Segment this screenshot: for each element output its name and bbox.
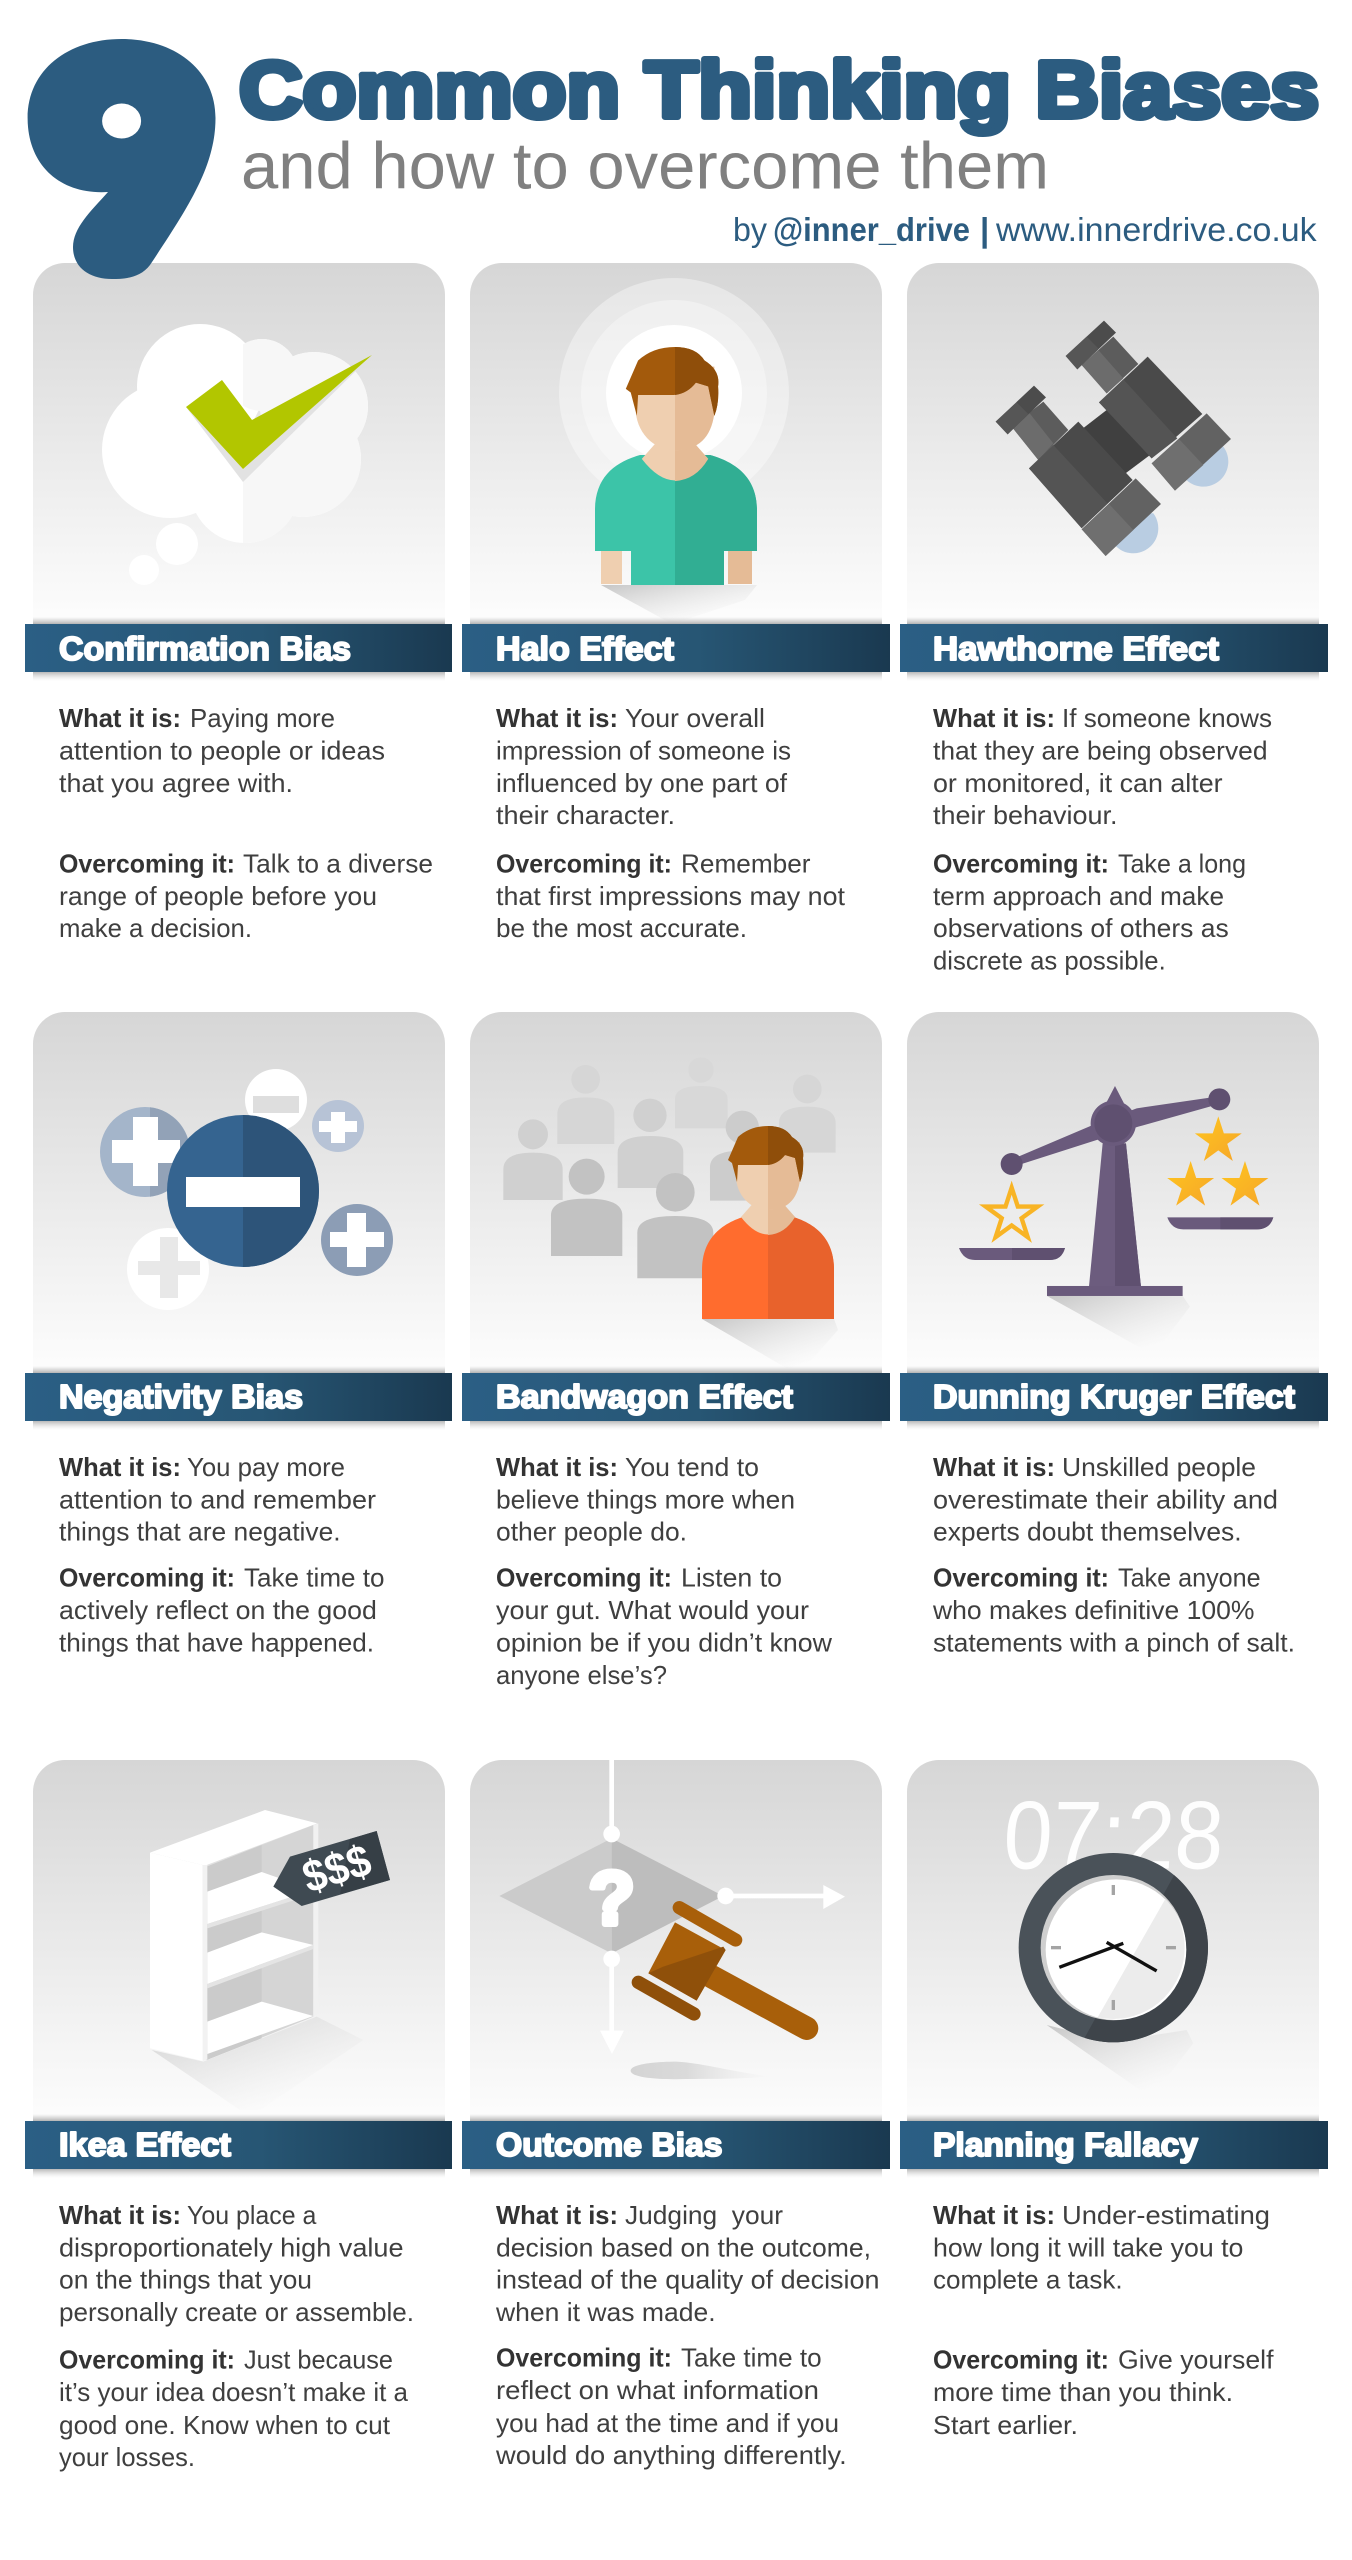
panel: Bandwagon Effect bbox=[462, 1012, 890, 1690]
text block: Negativity Bias: things that have happened. bbox=[59, 1628, 374, 1658]
icon: digital time and wall clock bbox=[1001, 1781, 1227, 2095]
panel background bbox=[907, 1760, 1319, 2121]
text block: Outcome Bias: you had at the time and if you bbox=[496, 2408, 839, 2438]
ribbon: Outcome Bias bbox=[462, 2114, 890, 2178]
icon: thought cloud with tick bbox=[102, 324, 372, 585]
text block: Hawthorne Effect: or monitored, it can alter bbox=[933, 768, 1223, 798]
ribbon: Hawthorne Effect bbox=[900, 617, 1328, 681]
text block: Hawthorne Effect: that they are being observed bbox=[933, 736, 1268, 766]
ribbon: Confirmation Bias: Confirmation Bias bbox=[59, 630, 351, 667]
text block: Halo Effect bbox=[496, 703, 846, 943]
text block: Negativity Bias: You pay more bbox=[187, 1452, 345, 1482]
byline: www.innerdrive.co.uk bbox=[995, 211, 1317, 248]
panel: Ikea Effect bbox=[25, 1760, 452, 2472]
text block: Bandwagon Effect: other people do. bbox=[496, 1517, 687, 1547]
icon: plus and minus circles bbox=[100, 1069, 393, 1310]
text block: Hawthorne Effect: their behaviour. bbox=[933, 800, 1118, 830]
text block: Negativity Bias: Take time to bbox=[244, 1563, 384, 1593]
text block: Dunning Kruger Effect: What it is: bbox=[933, 1452, 1055, 1482]
byline bbox=[733, 211, 1317, 248]
text block: Ikea Effect: on the things that you bbox=[59, 2265, 312, 2295]
panel: Halo Effect bbox=[462, 263, 890, 943]
text block: Planning Fallacy: Under-estimating bbox=[1062, 2200, 1270, 2230]
text block: Bandwagon Effect: Listen to bbox=[681, 1563, 782, 1593]
text block: Halo Effect: their character. bbox=[496, 800, 675, 830]
text block: Confirmation Bias bbox=[59, 703, 433, 943]
text block: Outcome Bias: What it is: bbox=[496, 2200, 618, 2230]
text block: Dunning Kruger Effect: statements with a pinch of salt. bbox=[933, 1628, 1295, 1658]
text block: Outcome Bias: Take time to bbox=[681, 2343, 822, 2373]
ribbon: Negativity Bias bbox=[25, 1366, 452, 1430]
text block: Planning Fallacy: What it is: bbox=[933, 2200, 1055, 2230]
text block: Dunning Kruger Effect: Unskilled people bbox=[1062, 1452, 1256, 1482]
numeral 9 bbox=[28, 39, 215, 279]
text block: Bandwagon Effect: your gut. What would your bbox=[496, 1595, 809, 1625]
ribbon: Halo Effect: Halo Effect bbox=[496, 630, 674, 667]
ribbon: Planning Fallacy bbox=[900, 2114, 1328, 2178]
text block: Confirmation Bias: make a decision. bbox=[59, 913, 252, 943]
panel: Hawthorne Effect bbox=[900, 263, 1328, 976]
text block: Bandwagon Effect: What it is: bbox=[496, 1452, 618, 1482]
text block: Hawthorne Effect: observations of others as bbox=[933, 913, 1229, 943]
ribbon: Planning Fallacy: Planning Fallacy bbox=[933, 2126, 1199, 2163]
ribbon: Ikea Effect bbox=[25, 2114, 452, 2178]
text block: Ikea Effect: You place a bbox=[187, 2200, 317, 2230]
text block: Bandwagon Effect: anyone else’s? bbox=[496, 1660, 667, 1690]
byline: by bbox=[733, 211, 767, 248]
panel background bbox=[907, 1012, 1319, 1373]
panel: Planning Fallacy bbox=[900, 1760, 1328, 2440]
text block: Bandwagon Effect: opinion be if you didn’t know bbox=[496, 1628, 832, 1658]
text block: Confirmation Bias: Overcoming it: bbox=[59, 848, 235, 878]
text block: Negativity Bias: actively reflect on the good bbox=[59, 1595, 377, 1625]
text block: Ikea Effect: Overcoming it: bbox=[59, 2345, 235, 2375]
icon: balance scales with stars bbox=[959, 1086, 1273, 1355]
text block: Negativity Bias: things that are negative. bbox=[59, 1517, 341, 1547]
ribbon: Outcome Bias: Outcome Bias bbox=[496, 2126, 722, 2163]
text block: Outcome Bias: decision based on the outcome, bbox=[496, 2232, 871, 2262]
text block: Planning Fallacy: how long it will take you to bbox=[933, 2232, 1243, 2262]
panel background bbox=[33, 1012, 445, 1373]
icon: digital time and wall clock: 07:28 bbox=[1001, 1781, 1227, 1889]
text block: Hawthorne Effect: term approach and make bbox=[933, 881, 1224, 911]
text block: Ikea Effect: Just because bbox=[244, 2345, 393, 2375]
text block: Bandwagon Effect: You tend to bbox=[625, 1452, 759, 1482]
text block: Hawthorne Effect: If someone knows bbox=[1062, 703, 1272, 733]
panel background bbox=[33, 1760, 445, 2121]
text block: Outcome Bias: instead of the quality of decision bbox=[496, 2265, 880, 2295]
text block: Confirmation Bias: Paying more bbox=[190, 703, 335, 733]
text block: Negativity Bias: attention to and remember bbox=[59, 1485, 376, 1515]
text block: Halo Effect: What it is: bbox=[496, 703, 618, 733]
text block: Negativity Bias: What it is: bbox=[59, 1452, 181, 1482]
text block: Ikea Effect: your losses. bbox=[59, 2442, 195, 2472]
text block: Dunning Kruger Effect: Take anyone bbox=[1118, 1563, 1261, 1593]
text block: Halo Effect: influenced by one part of bbox=[496, 768, 788, 798]
text block: Ikea Effect: good one. Know when to cut bbox=[59, 2410, 391, 2440]
text block: Ikea Effect: disproportionately high value bbox=[59, 2232, 404, 2262]
ribbon: Dunning Kruger Effect bbox=[900, 1366, 1328, 1430]
icon: person in orange shirt bbox=[702, 1126, 838, 1373]
icon: decision diamond and gavel bbox=[499, 1760, 845, 2079]
ribbon: Bandwagon Effect bbox=[462, 1366, 890, 1430]
text block: Confirmation Bias: attention to people or ideas bbox=[59, 736, 385, 766]
text block: Outcome Bias bbox=[495, 2200, 880, 2470]
ribbon: Halo Effect bbox=[462, 617, 890, 681]
ribbon: Hawthorne Effect: Hawthorne Effect bbox=[933, 630, 1219, 667]
title: Common Thinking Biases bbox=[239, 45, 1319, 134]
ribbon: Bandwagon Effect: Bandwagon Effect bbox=[496, 1378, 793, 1415]
text block: Planning Fallacy: complete a task. bbox=[933, 2265, 1123, 2295]
text block: Outcome Bias: when it was made. bbox=[495, 2297, 716, 2327]
text block: Planning Fallacy bbox=[933, 2200, 1274, 2440]
icon: flat-pack bookshelf with price tag bbox=[150, 1810, 390, 2110]
icon: binoculars bbox=[996, 321, 1231, 556]
panel background bbox=[33, 263, 445, 624]
panel background bbox=[470, 263, 882, 624]
panel: Negativity Bias bbox=[25, 1012, 452, 1658]
text block: Outcome Bias: would do anything differently. bbox=[495, 2440, 847, 2470]
panel background bbox=[470, 1760, 882, 2121]
panel: Dunning Kruger Effect bbox=[900, 1012, 1328, 1658]
ribbon: Dunning Kruger Effect: Dunning Kruger Effect bbox=[933, 1378, 1295, 1415]
text block: Negativity Bias: Overcoming it: bbox=[59, 1563, 235, 1593]
text block: Planning Fallacy: Overcoming it: bbox=[933, 2345, 1109, 2375]
text block: Halo Effect: be the most accurate. bbox=[496, 913, 747, 943]
text block: Ikea Effect: What it is: bbox=[59, 2200, 181, 2230]
text block: Hawthorne Effect: discrete as possible. bbox=[933, 946, 1166, 976]
text block: Bandwagon Effect: believe things more when bbox=[496, 1485, 795, 1515]
text block: Confirmation Bias: What it is: bbox=[59, 703, 181, 733]
panel: Outcome Bias bbox=[462, 1760, 890, 2470]
text block: Planning Fallacy: more time than you think. bbox=[933, 2377, 1233, 2407]
text block: Hawthorne Effect bbox=[933, 703, 1272, 976]
text block: Confirmation Bias: Talk to a diverse bbox=[243, 848, 433, 878]
ribbon: Negativity Bias: Negativity Bias bbox=[59, 1378, 303, 1415]
panel background bbox=[907, 263, 1319, 624]
text block: Confirmation Bias: range of people before you bbox=[59, 881, 377, 911]
text block: Outcome Bias: Judging your bbox=[625, 2200, 783, 2230]
text block: Dunning Kruger Effect: who makes definitive 100% bbox=[932, 1595, 1254, 1625]
text block: Halo Effect: impression of someone is bbox=[496, 736, 791, 766]
text block: Dunning Kruger Effect bbox=[932, 1452, 1295, 1658]
icon: decision diamond and gavel: ? bbox=[589, 1856, 635, 1940]
icon: person with halo bbox=[559, 278, 789, 624]
text block: Confirmation Bias: that you agree with. bbox=[59, 768, 293, 798]
byline: @inner_drive bbox=[773, 211, 970, 248]
text block: Negativity Bias bbox=[59, 1452, 384, 1658]
panel: Confirmation Bias bbox=[25, 263, 452, 943]
text block: Planning Fallacy: Give yourself bbox=[1118, 2345, 1274, 2375]
icon: crowd of grey people bbox=[503, 1057, 836, 1278]
text block: Halo Effect: that first impressions may not bbox=[496, 881, 846, 911]
text block: Ikea Effect: personally create or assemble. bbox=[59, 2297, 414, 2327]
text block: Hawthorne Effect: Take a long bbox=[1118, 848, 1246, 878]
byline: | bbox=[980, 211, 989, 248]
panel background bbox=[470, 1012, 882, 1373]
text block: Halo Effect: Your overall bbox=[625, 703, 765, 733]
icon: flat-pack bookshelf with price tag: $$$ bbox=[297, 1834, 377, 1903]
text block: Ikea Effect: it’s your idea doesn’t make it a bbox=[59, 2377, 409, 2407]
text block: Bandwagon Effect bbox=[496, 1452, 832, 1690]
subtitle: and how to overcome them bbox=[241, 128, 1049, 202]
text block: Dunning Kruger Effect: overestimate their ability and bbox=[933, 1485, 1278, 1515]
text block: Halo Effect: Remember bbox=[681, 848, 811, 878]
text block: Halo Effect: Overcoming it: bbox=[496, 848, 672, 878]
text block: Bandwagon Effect: Overcoming it: bbox=[496, 1563, 672, 1593]
text block: Ikea Effect bbox=[59, 2200, 414, 2472]
text block: Hawthorne Effect: What it is: bbox=[933, 703, 1055, 733]
text block: Hawthorne Effect: Overcoming it: bbox=[933, 848, 1109, 878]
ribbon: Ikea Effect: Ikea Effect bbox=[59, 2126, 231, 2163]
text block: Dunning Kruger Effect: Overcoming it: bbox=[933, 1563, 1109, 1593]
text block: Outcome Bias: reflect on what information bbox=[496, 2375, 819, 2405]
text block: Outcome Bias: Overcoming it: bbox=[496, 2343, 672, 2373]
ribbon: Confirmation Bias bbox=[25, 617, 452, 681]
text block: Planning Fallacy: Start earlier. bbox=[933, 2410, 1078, 2440]
text block: Dunning Kruger Effect: experts doubt themselves. bbox=[933, 1517, 1242, 1547]
